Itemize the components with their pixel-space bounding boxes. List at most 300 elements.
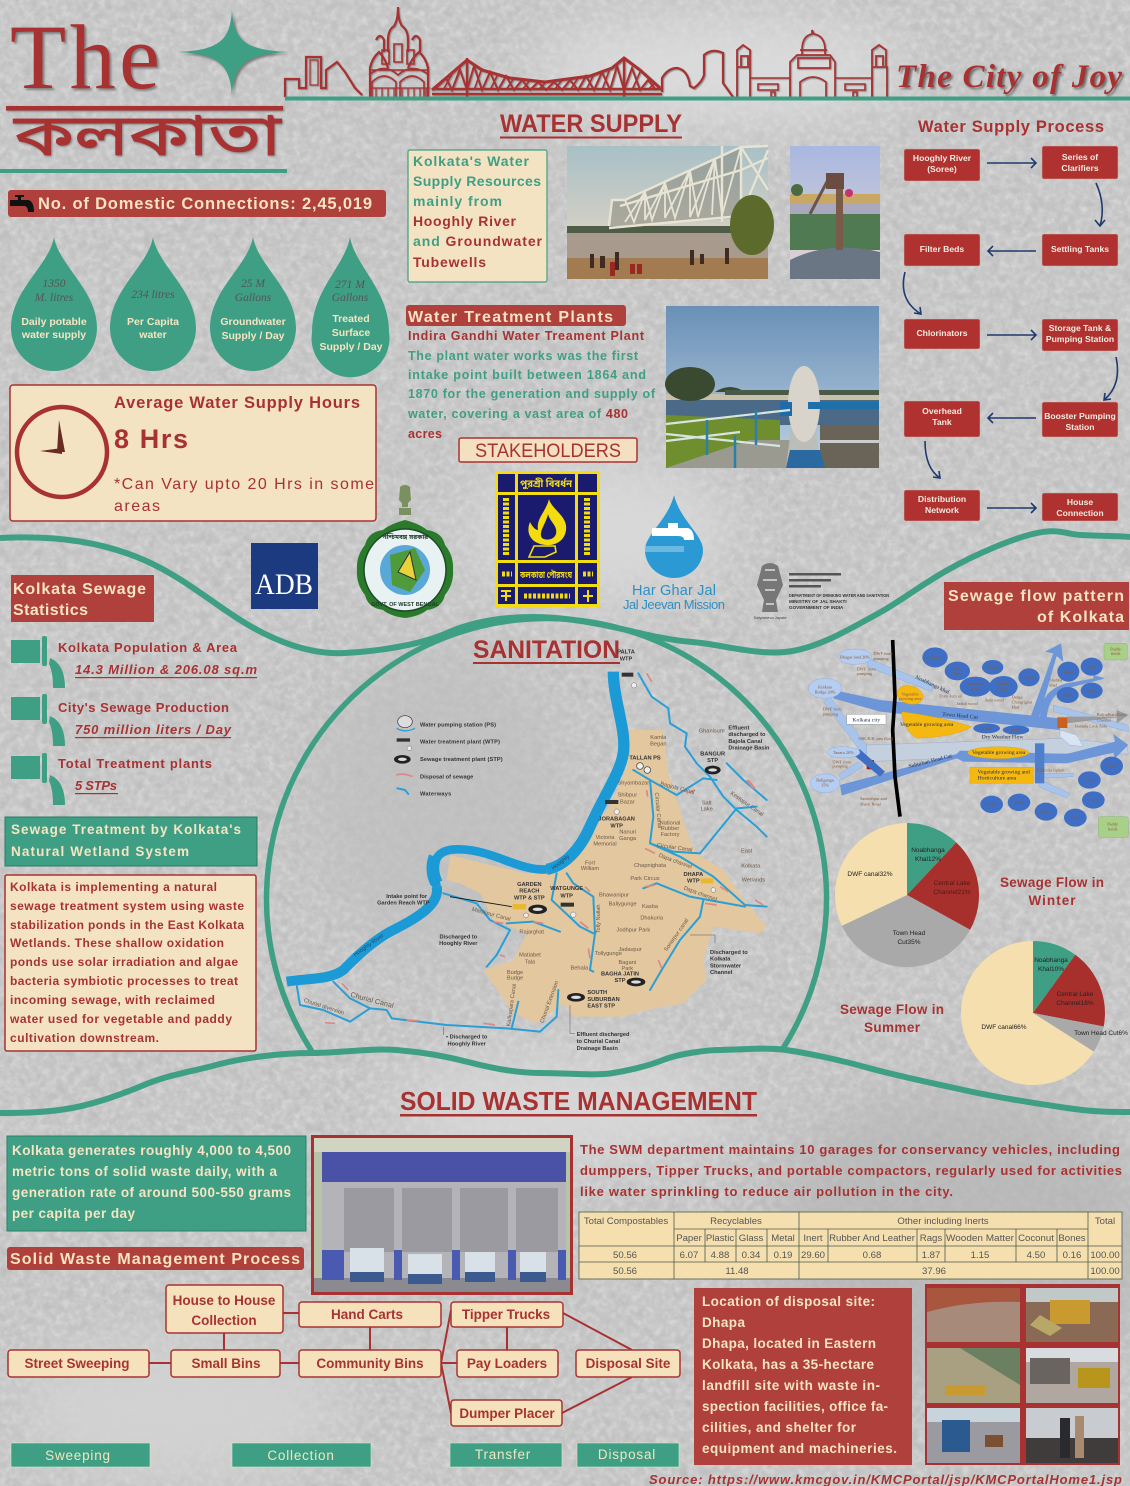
heading: Sanitation: SANITATION bbox=[473, 636, 620, 664]
text block: wetland description: incoming sewage, with reclaimed bbox=[10, 993, 215, 1007]
flow labels: DWF from bbox=[857, 667, 876, 672]
logo: Ministry of Jal Shakti bbox=[754, 563, 890, 620]
process step: Clarifiers: Clarifiers bbox=[1061, 163, 1099, 173]
text block: SWM department: dumppers, Tipper Trucks, and portable compactors, regularly used for activities bbox=[580, 1163, 1122, 1178]
box: Pay Loaders: Pay Loaders bbox=[467, 1356, 547, 1371]
box: House to House Collection bbox=[166, 1285, 283, 1333]
table: waste composition: 100.00 bbox=[1090, 1250, 1120, 1261]
map place names: Bazar bbox=[620, 799, 635, 805]
box: Community Bins: Community Bins bbox=[316, 1356, 424, 1371]
pie chart: sewage flow in winter: DWF canal32% bbox=[847, 871, 893, 878]
text block: SWM department bbox=[580, 1142, 1122, 1199]
stat: sewage production bbox=[11, 694, 232, 746]
flowchart: solid waste management process bbox=[8, 1285, 680, 1426]
Town Head Cut channel bbox=[833, 690, 1060, 730]
table: waste composition: Rubber And Leather bbox=[829, 1233, 916, 1244]
map plant icons and labels: TALLAN PS bbox=[629, 755, 661, 761]
map place names: Dapa channel bbox=[658, 853, 693, 870]
box: House to House Collection: House to House bbox=[173, 1293, 276, 1308]
pie chart: sewage flow in winter: Khal12% bbox=[915, 856, 941, 863]
panel: average water supply hours: areas bbox=[114, 498, 160, 515]
pie chart: sewage flow in summer: Central Lake bbox=[1057, 991, 1094, 998]
table: waste composition: 50.56 bbox=[613, 1266, 637, 1277]
drop: daily potable water supply: 1350 bbox=[42, 278, 66, 290]
drop: groundwater supply: Groundwater bbox=[220, 316, 286, 328]
map plant icons and labels: WTP bbox=[687, 879, 700, 885]
process step: Distribution Network bbox=[904, 490, 980, 521]
callout: daily waste generation: generation rate of around 500-550 grams bbox=[12, 1185, 291, 1200]
map place names: Began bbox=[650, 741, 667, 747]
map plant icons and labels: STP bbox=[614, 978, 626, 984]
map place names: Victoria bbox=[596, 835, 615, 841]
map plant icons and labels: STP bbox=[707, 758, 718, 764]
map annotations: Stormwater bbox=[710, 963, 742, 969]
map annotations: Effluent bbox=[728, 725, 749, 731]
label: sewage flow in winter: Winter bbox=[1028, 893, 1076, 908]
table: waste composition: Coconut bbox=[1018, 1233, 1054, 1244]
flow labels: Town Head Cut bbox=[942, 712, 979, 721]
map place names: Park bbox=[622, 966, 633, 972]
map place names: Matiabet bbox=[519, 953, 541, 959]
pie chart: sewage flow in winter: Cut35% bbox=[897, 939, 921, 946]
callout: daily waste generation: per capita per day bbox=[12, 1206, 135, 1221]
callout: daily waste generation: metric tons of solid waste daily, with a bbox=[12, 1164, 277, 1179]
flow labels: Suburban Head Cut bbox=[908, 753, 953, 770]
map plant icons and labels: WTP bbox=[560, 893, 573, 899]
pie chart: sewage flow in summer: DWF canal66% bbox=[981, 1024, 1027, 1031]
table: waste composition: 4.88 bbox=[711, 1250, 729, 1261]
table: waste composition: Total bbox=[1095, 1216, 1115, 1227]
tagline: The City of Joy: The City of Joy bbox=[896, 59, 1122, 95]
flow labels: Bhagar land 20% bbox=[840, 654, 870, 659]
icon: green four-point star bbox=[178, 10, 288, 95]
map legend bbox=[394, 716, 503, 798]
drop: daily potable water supply bbox=[11, 237, 97, 371]
text block: wetland description: sewage treatment system using waste bbox=[10, 899, 244, 913]
map place names: Behala bbox=[571, 965, 589, 971]
process step: Storage Tank: Storage Tank & bbox=[1049, 323, 1111, 333]
panel: water treatment plants: The plant water works was the first bbox=[408, 349, 639, 363]
stage label: Transfer: Transfer bbox=[475, 1447, 531, 1462]
flow labels: Channel bbox=[1097, 718, 1112, 723]
table: waste composition: 1.87 bbox=[922, 1250, 940, 1261]
flow labels: pumping bbox=[832, 763, 849, 768]
callout: daily waste generation: Kolkata generates roughly 4,000 to 4,500 bbox=[12, 1143, 291, 1158]
heading: Sewage flow pattern bbox=[944, 582, 1129, 630]
table: waste composition: 50.56 bbox=[613, 1250, 637, 1261]
flow labels: Bridge 20% bbox=[815, 689, 836, 694]
map place names: Rubber bbox=[661, 826, 679, 832]
photo: Howrah Bridge bbox=[567, 146, 774, 279]
map place names: Churial diversion bbox=[303, 998, 345, 1017]
map legend: Disposal of sewage bbox=[420, 775, 473, 781]
process step: House Connection: Connection bbox=[1056, 508, 1104, 518]
process step: Clarifiers bbox=[1042, 146, 1118, 179]
table: waste composition: Bones bbox=[1058, 1233, 1086, 1244]
process step: Filter Beds: Filter Beds bbox=[920, 244, 964, 254]
icon: sewage pipe bbox=[11, 636, 65, 688]
map place names: Bagani bbox=[619, 960, 636, 966]
map plant icons and labels: JORABAGAN bbox=[598, 817, 635, 823]
flow labels: Pond bbox=[982, 726, 992, 731]
map place names: Ganga bbox=[619, 836, 637, 842]
map place names: Ballygunge bbox=[609, 902, 637, 908]
summer slice: DWF canal bbox=[961, 941, 1094, 1085]
flow labels: Pond bbox=[1087, 688, 1097, 693]
process step: Settling Tanks: Settling Tanks bbox=[1051, 244, 1109, 254]
process step: House Connection: House bbox=[1067, 497, 1093, 507]
decorative green section curves bbox=[0, 531, 1130, 1113]
map place names: Shibpur bbox=[618, 793, 637, 799]
stat: population and area bbox=[11, 636, 257, 688]
title: Kolkata in Bengali: কলকাতা bbox=[13, 102, 283, 179]
process step: Storage Tank: Pumping Station bbox=[1046, 334, 1114, 344]
winter slice: Town Head Cut bbox=[842, 895, 970, 967]
stat: population and area: 14.3 Million & 206.08 sq.m bbox=[75, 662, 257, 677]
flow channels bbox=[823, 658, 1128, 798]
stage label: Disposal bbox=[577, 1443, 679, 1467]
map place names: Tolly Nullah bbox=[596, 904, 602, 933]
flow labels: Pond bbox=[1085, 778, 1095, 783]
map annotations: to Churial Canal bbox=[577, 1039, 620, 1045]
panel: water treatment plants: acres bbox=[408, 427, 442, 441]
process step: House Connection bbox=[1042, 493, 1118, 521]
map place names: Jodhpur Park bbox=[617, 928, 650, 934]
stat: sewage production: 750 million liters / Day bbox=[75, 722, 232, 737]
process step: Overhead Tank bbox=[904, 401, 980, 437]
flow labels: Santoshpur and bbox=[860, 796, 888, 801]
photo: soil bbox=[927, 1288, 1020, 1342]
drop: groundwater supply: 25 M bbox=[241, 278, 266, 290]
title underline bbox=[0, 169, 287, 173]
stage label: Sweeping: Sweeping bbox=[45, 1448, 111, 1463]
table: waste composition: 1.15 bbox=[971, 1250, 989, 1261]
map annotations: discharged to bbox=[728, 732, 766, 738]
map plant icons and labels: SOUTH bbox=[587, 990, 607, 996]
table: waste composition: 0.34 bbox=[742, 1250, 761, 1261]
heading: natural wetland system bbox=[5, 817, 257, 866]
map plant icons and labels: SUBURBAN bbox=[587, 997, 620, 1003]
box: Disposal Site bbox=[576, 1350, 680, 1377]
label: sewage flow in winter: Sewage Flow in bbox=[1000, 875, 1104, 890]
map plant icons and labels: DHAPA bbox=[683, 872, 703, 878]
flow labels: Tanara 20% bbox=[833, 750, 854, 755]
text block: wetland description: water used for vegetable and paddy bbox=[9, 1012, 232, 1026]
flow labels: Vegetable growing area bbox=[972, 750, 1026, 756]
photo: hand pump bbox=[790, 146, 880, 279]
flowchart: water supply process bbox=[903, 146, 1118, 521]
map annotations: Hooghly River bbox=[447, 1042, 487, 1048]
flow labels: fields bbox=[1108, 827, 1118, 832]
map annotations: Hooghly River bbox=[439, 941, 478, 947]
flow labels: Paddy bbox=[1110, 647, 1122, 652]
panel: water treatment plants bbox=[406, 305, 656, 441]
map place names: Wetlands bbox=[742, 878, 765, 884]
map place names: Manikpur Canal bbox=[471, 907, 511, 923]
map annotations: Kolkata bbox=[710, 956, 731, 962]
map place names: Budge bbox=[507, 975, 523, 981]
table: waste composition: Rags bbox=[920, 1233, 942, 1244]
box: Pay Loaders bbox=[457, 1350, 558, 1377]
Suburban Head Cut channel bbox=[840, 734, 1128, 796]
table: waste composition: Metal bbox=[771, 1233, 795, 1244]
panel: water treatment plants: Indira Gandhi Water Treament Plant bbox=[408, 329, 645, 343]
flow labels: Dum dum oil bbox=[939, 694, 963, 699]
process step: Booster Pumping: Station bbox=[1065, 422, 1095, 432]
drop: daily potable water supply: water supply bbox=[21, 329, 86, 341]
callout: water sources: Hooghly River bbox=[413, 213, 517, 229]
pie chart: sewage flow in summer bbox=[961, 941, 1128, 1085]
logo: Government of West Bengal: পশ্চিমবঙ্গ সরকার bbox=[382, 533, 428, 542]
pond ellipses bbox=[922, 647, 1123, 827]
drop: daily potable water supply: Daily potable bbox=[21, 316, 87, 328]
main outfall arrow bbox=[1030, 643, 1063, 720]
box: Tipper Trucks bbox=[451, 1302, 563, 1327]
map legend: Water pumping station (PS) bbox=[420, 723, 496, 729]
stat: treatment plants bbox=[11, 753, 212, 805]
drop: per capita water: Per Capita bbox=[127, 316, 179, 328]
box: Street Sweeping bbox=[8, 1350, 149, 1377]
map place names: Jadavpur bbox=[618, 947, 642, 953]
flow labels: Pond bbox=[1042, 809, 1051, 814]
heading: Solid Waste Management: SOLID WASTE MANAGEMENT bbox=[400, 1086, 757, 1116]
map legend: Sewage treatment plant (STP) bbox=[420, 757, 503, 763]
winter slice: Central Lake Channel bbox=[907, 842, 979, 930]
pie chart: sewage flow in winter: Noabhanga bbox=[911, 847, 945, 854]
flow labels: pumping bbox=[873, 656, 890, 661]
icon: sewage pipe bbox=[11, 753, 65, 805]
callout: water sources: Tubewells bbox=[413, 254, 486, 270]
title: The: The bbox=[10, 6, 160, 108]
flow labels bbox=[815, 647, 1127, 832]
flow labels: Bidyadhari/Kulti bbox=[1097, 712, 1127, 717]
photo: control room bbox=[1026, 1408, 1118, 1463]
drop: treated surface supply: Surface bbox=[332, 327, 370, 339]
drop: per capita water: 234 litres bbox=[131, 289, 175, 301]
map place names: Churial Canal bbox=[349, 990, 395, 1010]
drop: groundwater supply: Supply / Day bbox=[221, 330, 285, 342]
box: House to House Collection: Collection bbox=[191, 1313, 257, 1328]
map plant icons and labels: REACH bbox=[519, 889, 539, 895]
pie chart: sewage flow in summer: Channel18% bbox=[1056, 1000, 1094, 1007]
panel: water treatment plants: intake point built between 1864 and bbox=[408, 368, 646, 382]
map plant icons and labels: EAST STP bbox=[587, 1004, 615, 1010]
box: Hand Carts bbox=[299, 1302, 441, 1327]
panel: water treatment plants: water, covering a vast area of 480 bbox=[407, 407, 628, 421]
map place names: Fort bbox=[585, 860, 595, 866]
callout: water sources bbox=[408, 150, 547, 282]
text block: wetland description: Wetlands. These shallow oxidation bbox=[10, 936, 224, 950]
table: waste composition: Wooden Matter bbox=[946, 1233, 1015, 1244]
process step: Hooghly River: (Soree) bbox=[927, 164, 957, 174]
flow labels: Vegetable growing and bbox=[978, 770, 1030, 776]
map place names: Hooghly bbox=[551, 854, 571, 872]
flow labels: Bheri bbox=[971, 687, 981, 692]
map place names: Budge bbox=[507, 970, 523, 976]
text block: wetland description: cultivation downstream. bbox=[10, 1031, 159, 1045]
heading: Sewage flow pattern: Sewage flow pattern bbox=[948, 588, 1124, 605]
table: waste composition: Total Compostables bbox=[584, 1216, 668, 1227]
flow labels: Paddy bbox=[1107, 822, 1119, 827]
box: Tipper Trucks: Tipper Trucks bbox=[462, 1307, 550, 1322]
process step: Settling Tanks bbox=[1042, 234, 1118, 266]
map annotations: Discharged to bbox=[710, 950, 748, 956]
flow labels: 15% bbox=[821, 783, 829, 788]
map place names: Kestopur Canal bbox=[729, 791, 764, 818]
heading: Kolkata Sewage Statistics bbox=[11, 575, 154, 622]
map place names: Bagjola Canal bbox=[659, 781, 695, 796]
flow labels: khal bbox=[1049, 683, 1058, 688]
map annotations: Intake point for bbox=[386, 894, 428, 900]
text block: wetland description: Kolkata is implementing a natural bbox=[10, 880, 217, 894]
flow labels: Vegetable bbox=[901, 692, 919, 697]
banner: domestic connections: No. of Domestic Connections: 2,45,019 bbox=[38, 195, 372, 213]
pie chart: sewage flow in summer: Noabhanga bbox=[1034, 957, 1068, 964]
box: Disposal Site: Disposal Site bbox=[586, 1356, 671, 1371]
flow labels: growing area bbox=[899, 696, 921, 701]
pie chart: sewage flow in winter: Town Head bbox=[893, 930, 926, 937]
callout: water sources: and Groundwater bbox=[413, 233, 543, 249]
process step: Booster Pumping bbox=[1042, 402, 1118, 437]
flow labels: Jaduli wood bbox=[957, 701, 979, 706]
flow labels: DWF from bbox=[823, 707, 842, 712]
logo: Har Ghar Jal: Jal Jeevan Mission bbox=[623, 597, 725, 612]
heading: natural wetland system: Natural Wetland System bbox=[11, 844, 189, 859]
logo: Kolkata Municipal Corporation: পুরশ্রী বিবর্ধন bbox=[520, 478, 573, 492]
flow labels: Pond bbox=[1071, 815, 1081, 820]
flow labels: Jhuli bbox=[953, 666, 962, 671]
text block: disposal site Dhapa: Dhapa bbox=[702, 1315, 745, 1330]
map place names: Chapnighata bbox=[634, 863, 667, 869]
vegetable growing areas bbox=[895, 683, 1033, 783]
process step: Filter Beds bbox=[904, 234, 980, 266]
text block: disposal site Dhapa: Location of disposal site: bbox=[702, 1294, 875, 1309]
map river Hooghly bbox=[287, 672, 624, 982]
stage label: Collection: Collection bbox=[267, 1448, 335, 1463]
map plant icons and labels: BAGHA JATIN bbox=[601, 971, 639, 977]
map place names: Tollygunge bbox=[595, 951, 622, 957]
drop: treated surface supply: Gallons bbox=[332, 292, 369, 304]
flow labels: Horticulture area bbox=[978, 775, 1017, 781]
stage label: Sweeping bbox=[11, 1443, 150, 1467]
panel: water treatment plants: 1870 for the generation and supply of bbox=[408, 387, 656, 401]
pie chart: sewage flow in winter bbox=[835, 823, 979, 967]
process step: Distribution Network: Network bbox=[925, 505, 959, 515]
box: Community Bins bbox=[299, 1350, 441, 1377]
label: stakeholders: STAKEHOLDERS bbox=[475, 441, 621, 462]
map place names: East bbox=[741, 849, 753, 855]
flow labels: Pond bbox=[988, 665, 998, 670]
winter slice: DWF canal bbox=[835, 823, 907, 926]
text block: disposal site Dhapa bbox=[694, 1288, 912, 1465]
panel: average water supply hours: *Can Vary upto 20 Hrs in some bbox=[114, 476, 374, 493]
map place names: Salt bbox=[702, 801, 712, 807]
map place names: Factory bbox=[661, 832, 680, 838]
map place names: Kalikapara Canal bbox=[506, 983, 518, 1027]
callout: water sources: mainly from bbox=[413, 193, 502, 209]
flow labels: Pond bbox=[1107, 764, 1117, 769]
map plant icons and labels: WTP & STP bbox=[514, 895, 545, 901]
photo: bulldozer bbox=[1026, 1288, 1118, 1342]
logo: Ministry of Jal Shakti: GOVERNMENT OF INDIA bbox=[789, 605, 844, 610]
table: waste composition: 37.96 bbox=[922, 1266, 946, 1277]
flow labels: Pond bbox=[1025, 675, 1034, 680]
table: waste composition: 0.19 bbox=[774, 1250, 792, 1261]
map plant icons and labels: PALTA bbox=[617, 649, 635, 655]
drop: per capita water: water bbox=[138, 329, 167, 341]
flow labels: Pond bbox=[1089, 798, 1099, 803]
winter slice: Noabhanga Khal bbox=[907, 823, 956, 895]
heading: SWM process: Solid Waste Management Process bbox=[10, 1251, 300, 1268]
map legend: Water treatment plant (WTP) bbox=[420, 740, 500, 746]
map place names: William bbox=[581, 866, 599, 872]
map place names: Kasba bbox=[642, 904, 659, 910]
map annotations: Effluent discharged bbox=[577, 1032, 630, 1038]
logo: Kolkata Municipal Corporation: কলকাতা পৌরসংঘ bbox=[519, 569, 573, 582]
map place names: Sonarpur canal bbox=[663, 918, 690, 953]
diagram: sewage flow pattern of Kolkata bbox=[808, 640, 1128, 837]
stage label: Transfer bbox=[450, 1443, 562, 1467]
heading: natural wetland system: Sewage Treatment by Kolkata's bbox=[11, 822, 241, 837]
photo: water treatment plant intake bbox=[665, 306, 879, 468]
flow labels: a-Bi Bheri bbox=[926, 655, 945, 660]
heading: Kolkata Sewage Statistics: Statistics bbox=[13, 602, 88, 619]
stage label: Collection bbox=[232, 1443, 371, 1467]
flow labels: Bheri bbox=[953, 671, 963, 676]
flow labels: SSK R.R. jam flood bbox=[858, 736, 894, 741]
heading: Water Supply Process: Water Supply Process bbox=[918, 118, 1104, 136]
map place names: Kolkata bbox=[741, 863, 761, 869]
text block: disposal site Dhapa: spection facilities, office fa- bbox=[702, 1399, 888, 1414]
process step: Clarifiers: Series of bbox=[1062, 152, 1098, 162]
process step: Hooghly River: Hooghly River bbox=[913, 153, 972, 163]
flow labels: khal bbox=[1012, 704, 1020, 709]
flow labels: Vegetable growing area bbox=[900, 722, 954, 728]
logo: Kolkata Municipal Corporation bbox=[495, 471, 600, 607]
logo: Government of West Bengal bbox=[357, 485, 453, 618]
stage label: Disposal: Disposal bbox=[598, 1447, 656, 1462]
flow labels: Chingrighat bbox=[1012, 699, 1033, 704]
map place names: Circular Canal bbox=[656, 843, 693, 854]
city boundary line bbox=[893, 640, 900, 817]
drop: daily potable water supply: M. litres bbox=[34, 292, 74, 304]
map plant icons and labels bbox=[513, 649, 725, 1010]
flow labels: pumping bbox=[823, 711, 839, 716]
summer slice: Noabhanga Khal bbox=[1033, 941, 1075, 1013]
flow labels: Pond bbox=[1015, 800, 1024, 805]
process step: Chlorinators bbox=[904, 319, 980, 349]
flow labels: Pond bbox=[1064, 669, 1074, 674]
logo: Har Ghar Jal bbox=[623, 495, 725, 612]
process connectors bbox=[149, 1310, 632, 1413]
flow labels: Kulkulia siphon bbox=[1037, 768, 1065, 773]
process step: Booster Pumping: Booster Pumping bbox=[1044, 411, 1116, 421]
map annotations bbox=[377, 725, 770, 1052]
flow labels: Pond bbox=[1012, 728, 1021, 733]
flow labels: Jaduramm bbox=[966, 681, 985, 686]
map place names: National bbox=[660, 820, 680, 826]
photo: conservancy garage bbox=[311, 1135, 573, 1295]
icon: water tap bbox=[10, 195, 34, 212]
logo: ADB: ADB bbox=[255, 568, 313, 601]
process step: Distribution Network: Distribution bbox=[918, 494, 966, 504]
flow labels: Bheri bbox=[999, 687, 1009, 692]
drop: treated surface supply: Supply / Day bbox=[319, 341, 383, 353]
table: waste composition: 0.68 bbox=[863, 1250, 881, 1261]
callout: water sources: Kolkata's Water bbox=[413, 153, 530, 169]
flow labels: pumping bbox=[857, 671, 873, 676]
source ellipses bbox=[808, 649, 872, 793]
